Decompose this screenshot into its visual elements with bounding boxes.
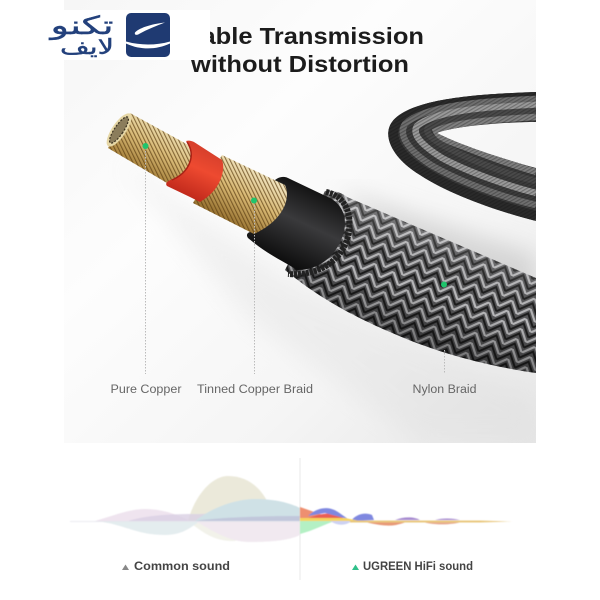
logo wordmark: تكنو xyxy=(47,11,114,40)
sound wave: common sound xyxy=(70,476,300,542)
nylon braid sleeve xyxy=(285,191,536,373)
title: without Distortion xyxy=(190,51,409,77)
component labels: Nylon Braid xyxy=(412,384,476,396)
component labels: Tinned Copper Braid xyxy=(197,384,313,396)
tinned copper braid xyxy=(193,155,287,234)
logo wordmark: لايف xyxy=(60,35,114,59)
title: Stable Transmission xyxy=(176,23,424,49)
pointer lines xyxy=(146,148,444,374)
black inner jacket xyxy=(247,177,345,270)
caption: hifi sound: UGREEN HiFi sound xyxy=(363,561,473,573)
logo wordmark xyxy=(47,11,114,59)
logo background xyxy=(0,10,210,60)
green dots xyxy=(142,143,447,288)
component labels: Pure Copper xyxy=(110,384,182,396)
braid collar xyxy=(288,192,349,274)
title xyxy=(191,27,422,72)
divider xyxy=(299,458,301,580)
logo icon xyxy=(126,13,170,57)
component labels xyxy=(110,384,476,396)
sound wave: hifi sound xyxy=(300,507,512,534)
red insulation sleeve xyxy=(166,141,223,202)
pure copper core xyxy=(106,113,190,183)
photo panel: cable cross-section xyxy=(64,0,540,443)
logo xyxy=(47,11,170,59)
cable coil in background xyxy=(388,92,536,221)
copper strand end xyxy=(106,113,132,147)
caption: common sound: Common sound xyxy=(134,561,230,573)
